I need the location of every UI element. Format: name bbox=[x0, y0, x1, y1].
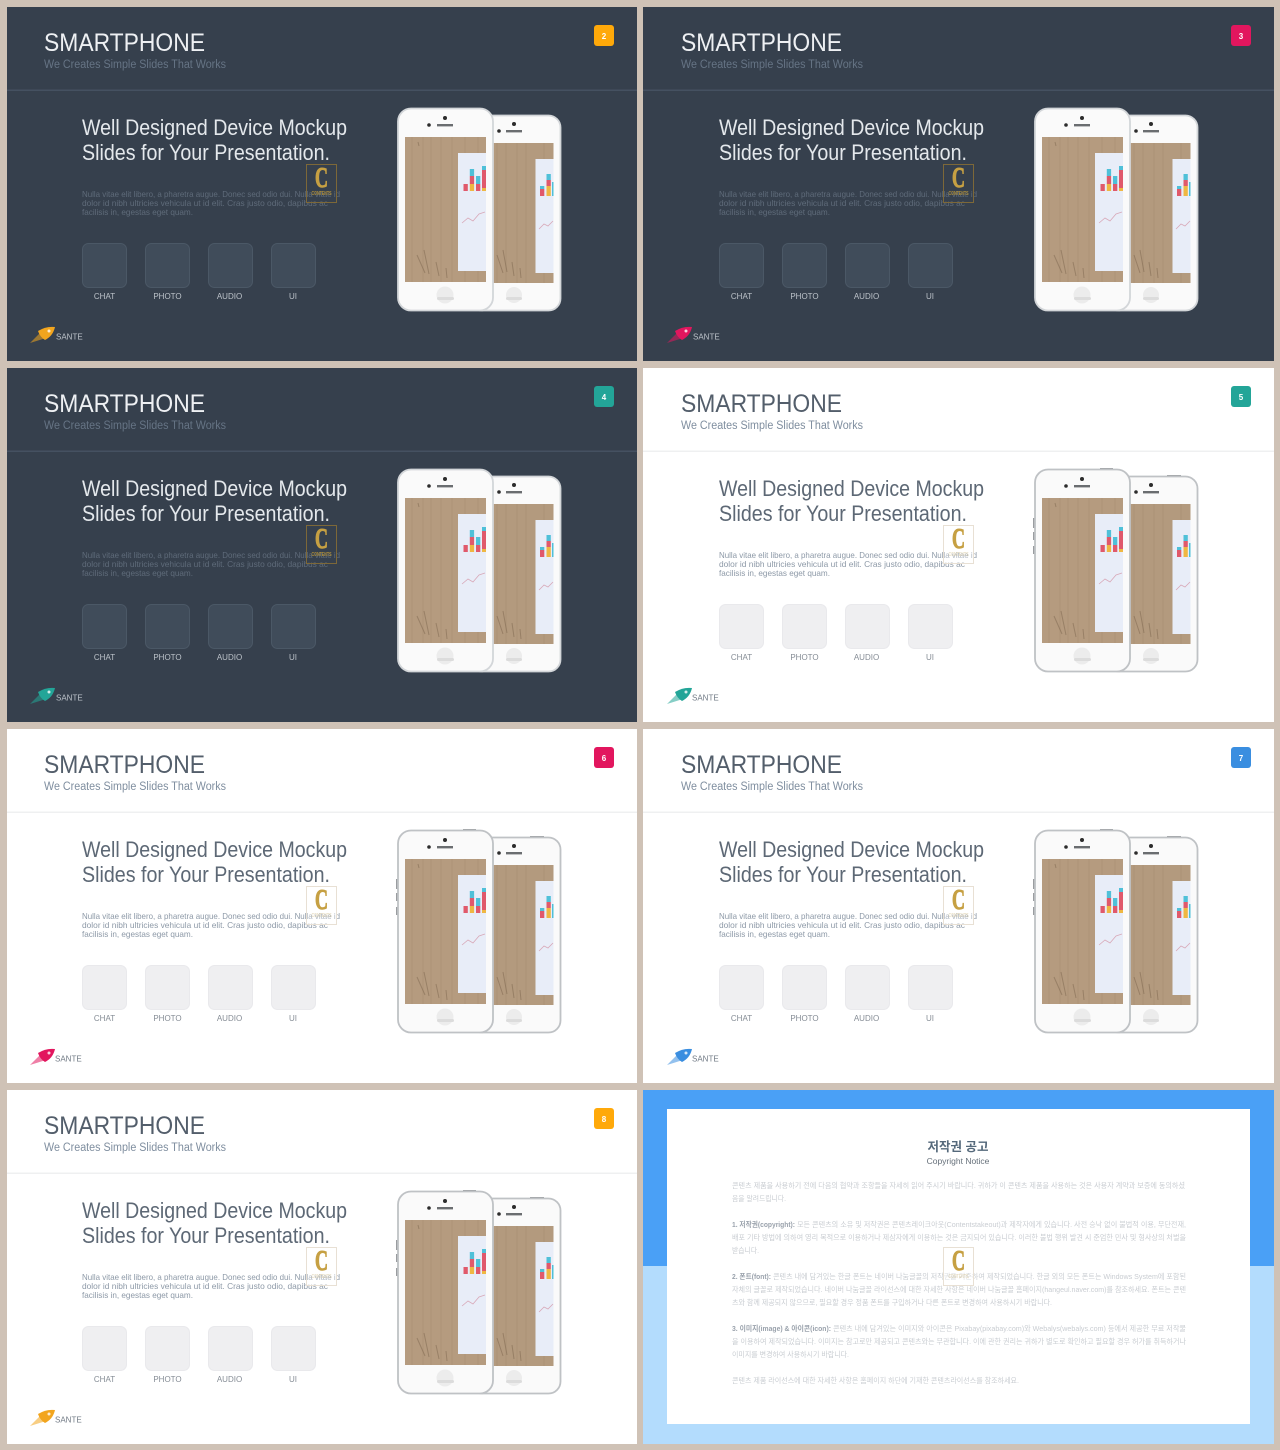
phone mockups bbox=[1033, 107, 1198, 310]
body text bbox=[82, 550, 340, 578]
icon labels bbox=[731, 653, 934, 662]
notice section 2: 콘텐츠 내에 담겨있는 한글 폰트는 네이버 나눔글꼴의 저작권을 기준하여 제작되었습니다. 한글 외의 모든 폰트는 Windows System에 포함된 bbox=[773, 1271, 1186, 1281]
title: SMARTPHONE bbox=[681, 29, 842, 57]
icon tiles bbox=[720, 244, 952, 288]
icon labels: AUDIO bbox=[217, 653, 242, 662]
notice section 2 bbox=[732, 1271, 1186, 1307]
phone mockups bbox=[396, 829, 560, 1032]
heading bbox=[82, 1198, 347, 1248]
slide 6: light, pink badge bbox=[7, 729, 637, 1083]
heading: Well Designed Device Mockup bbox=[82, 1198, 347, 1223]
page number badge bbox=[1231, 25, 1251, 46]
phone mockups bbox=[396, 468, 560, 672]
slide 8: light, orange badge bbox=[7, 1090, 637, 1444]
watermark: CONTENTS bbox=[312, 552, 332, 558]
notice subtitle: Copyright Notice bbox=[927, 1156, 990, 1166]
body text: dolor id nibh ultricies vehicula ut id elit. Cras justo odio, dapibus ac bbox=[719, 920, 966, 930]
icon labels: UI bbox=[926, 1014, 934, 1023]
body text: facilisis in, egestas eget quam. bbox=[82, 568, 193, 578]
title: SMARTPHONE bbox=[44, 1112, 205, 1140]
icon labels: AUDIO bbox=[854, 1014, 879, 1023]
icon labels bbox=[94, 292, 297, 301]
light blue background band bbox=[643, 1266, 1274, 1444]
body text: facilisis in, egestas eget quam. bbox=[82, 1290, 193, 1300]
icon tiles bbox=[82, 244, 316, 288]
icon labels: PHOTO bbox=[153, 653, 182, 662]
page number badge: 5 bbox=[1239, 393, 1244, 402]
body text bbox=[719, 550, 977, 578]
heading bbox=[719, 115, 984, 165]
notice intro bbox=[732, 1180, 1185, 1203]
logo: SANTE bbox=[55, 1054, 82, 1064]
page number badge bbox=[594, 25, 614, 46]
watermark: CONTENTS bbox=[948, 1274, 969, 1280]
body text bbox=[82, 1272, 340, 1300]
page number badge bbox=[1231, 747, 1251, 768]
notice section 3 bbox=[732, 1323, 1186, 1359]
body text: dolor id nibh ultricies vehicula ut id elit. Cras justo odio, dapibus ac bbox=[82, 198, 329, 208]
phone mockups bbox=[1033, 829, 1198, 1032]
page number badge bbox=[594, 386, 614, 407]
logo: SANTE bbox=[693, 332, 720, 342]
watermark: CONTENTS bbox=[312, 1274, 332, 1280]
icon labels: AUDIO bbox=[217, 1014, 242, 1023]
icon labels: AUDIO bbox=[217, 292, 242, 301]
watermark bbox=[944, 884, 974, 924]
watermark: C bbox=[952, 1245, 965, 1277]
icon labels: CHAT bbox=[94, 1014, 115, 1023]
heading: Slides for Your Presentation. bbox=[82, 862, 330, 887]
slide 7: light, blue badge bbox=[643, 729, 1274, 1083]
body text: dolor id nibh ultricies vehicula ut id elit. Cras justo odio, dapibus ac bbox=[719, 198, 966, 208]
heading: Slides for Your Presentation. bbox=[719, 862, 967, 887]
notice closing line: 콘텐츠 제품 라이선스에 대한 자세한 사항은 홈페이지 하단에 기재한 콘텐츠라이선스를 참조하세요. bbox=[732, 1375, 1019, 1385]
notice section 3: 을 이용하여 제작되었습니다. 이미지는 참고로만 제공되고 콘텐츠와는 무관합니다. 이에 관한 권리는 귀하가 별도로 확인하고 필요할 경우 허가를 취득하거나 bbox=[732, 1336, 1186, 1346]
notice section 1: 1. 저작권(copyright): bbox=[732, 1219, 795, 1229]
body text: dolor id nibh ultricies vehicula ut id elit. Cras justo odio, dapibus ac bbox=[82, 920, 329, 930]
heading: Well Designed Device Mockup bbox=[82, 115, 347, 140]
notice section 3: 콘텐츠 내에 담겨있는 이미지와 아이콘은 Pixabay(pixabay.com)와 Webalys(webalys.com) 등에서 제공한 무료 저작물 bbox=[833, 1323, 1186, 1333]
icon labels: AUDIO bbox=[854, 653, 879, 662]
body text: Nulla vitae elit libero, a pharetra augue. Donec sed odio dui. Nulla vitae id bbox=[82, 1272, 340, 1282]
body text: facilisis in, egestas eget quam. bbox=[719, 568, 830, 578]
icon labels: PHOTO bbox=[790, 653, 819, 662]
icon labels: PHOTO bbox=[153, 292, 182, 301]
page number badge: 6 bbox=[602, 754, 607, 763]
phone mockups bbox=[396, 107, 560, 310]
body text: dolor id nibh ultricies vehicula ut id elit. Cras justo odio, dapibus ac bbox=[719, 559, 966, 569]
subtitle: We Creates Simple Slides That Works bbox=[44, 781, 226, 793]
heading bbox=[82, 115, 347, 165]
icon labels: UI bbox=[926, 292, 934, 301]
notice section 1 bbox=[732, 1219, 1186, 1255]
watermark: CONTENTS bbox=[948, 552, 969, 558]
page number badge bbox=[594, 1108, 614, 1129]
heading bbox=[82, 837, 347, 887]
heading bbox=[82, 476, 347, 526]
page number badge: 4 bbox=[602, 393, 607, 402]
logo: SANTE bbox=[55, 1416, 82, 1424]
icon tiles bbox=[720, 604, 952, 648]
icon labels bbox=[731, 292, 934, 301]
body text: dolor id nibh ultricies vehicula ut id elit. Cras justo odio, dapibus ac bbox=[82, 1281, 329, 1291]
icon labels: CHAT bbox=[731, 292, 752, 301]
body text: Nulla vitae elit libero, a pharetra augue. Donec sed odio dui. Nulla vitae id bbox=[719, 189, 977, 199]
icon tiles bbox=[82, 1326, 316, 1370]
heading: Slides for Your Presentation. bbox=[719, 501, 967, 526]
watermark bbox=[306, 884, 336, 924]
icon labels: UI bbox=[289, 1014, 297, 1023]
watermark: CONTENTS bbox=[312, 913, 332, 919]
logo: SANTE bbox=[56, 332, 83, 342]
heading: Slides for Your Presentation. bbox=[82, 1223, 330, 1248]
heading bbox=[719, 837, 984, 887]
slide 9: copyright notice bbox=[643, 1090, 1274, 1444]
page number badge bbox=[1231, 386, 1251, 407]
icon labels bbox=[731, 1014, 934, 1023]
watermark: CONTENTS bbox=[948, 191, 969, 197]
slide 5: light, teal badge bbox=[643, 368, 1274, 722]
icon tiles bbox=[82, 604, 316, 648]
icon labels: CHAT bbox=[94, 653, 115, 662]
icon labels: PHOTO bbox=[153, 1014, 182, 1023]
notice intro: 콘텐츠 제품을 사용하기 전에 다음의 협약과 조항들을 자세히 읽어 주시기 바랍니다. 귀하가 이 콘텐츠 제품을 사용하는 것은 사용자 계약과 보증에 동의하셨 bbox=[732, 1180, 1185, 1190]
body text: Nulla vitae elit libero, a pharetra augue. Donec sed odio dui. Nulla vitae id bbox=[719, 550, 977, 560]
watermark: C bbox=[952, 523, 965, 555]
icon labels: CHAT bbox=[731, 1014, 752, 1023]
white notice card bbox=[667, 1109, 1250, 1424]
page number badge: 3 bbox=[1239, 32, 1244, 41]
notice section 3: 3. 이미지(image) & 아이콘(icon): bbox=[732, 1323, 831, 1333]
icon labels: UI bbox=[289, 1375, 297, 1384]
body text bbox=[82, 911, 340, 939]
slide 3: dark, pink badge bbox=[643, 7, 1274, 361]
icon tiles bbox=[82, 966, 316, 1010]
phone mockups bbox=[396, 1190, 560, 1394]
icon labels: CHAT bbox=[731, 653, 752, 662]
heading: Well Designed Device Mockup bbox=[719, 476, 984, 501]
heading: Well Designed Device Mockup bbox=[82, 476, 347, 501]
watermark bbox=[306, 162, 336, 202]
logo: SANTE bbox=[56, 694, 83, 702]
body text: facilisis in, egestas eget quam. bbox=[82, 929, 193, 939]
icon labels: UI bbox=[926, 653, 934, 662]
heading: Well Designed Device Mockup bbox=[719, 837, 984, 862]
notice section 2: 2. 폰트(font): bbox=[732, 1272, 771, 1281]
logo bbox=[30, 1049, 82, 1065]
slide 4: dark, teal badge bbox=[7, 368, 637, 722]
notice section 3: 이미지를 변경하여 사용하시기 바랍니다. bbox=[732, 1349, 849, 1359]
logo bbox=[667, 688, 719, 704]
subtitle: We Creates Simple Slides That Works bbox=[44, 1142, 226, 1154]
body text bbox=[82, 189, 340, 217]
subtitle: We Creates Simple Slides That Works bbox=[44, 420, 226, 432]
watermark bbox=[944, 1245, 974, 1286]
logo: SANTE bbox=[692, 1054, 719, 1064]
icon labels bbox=[94, 653, 297, 662]
logo bbox=[667, 327, 720, 343]
notice section 1: 배포 기타 방법에 의하여 영리 목적으로 이용하거나 제삼자에게 이용하는 것은 금지되어 있습니다. 이러한 불법 행위 발견 시 준엄한 민사 및 형사상의 처벌을 bbox=[732, 1232, 1186, 1242]
logo bbox=[30, 327, 83, 343]
heading: Well Designed Device Mockup bbox=[719, 115, 984, 140]
blue background band bbox=[643, 1090, 1274, 1266]
notice section 2: 자체의 글꼴로 제작되었습니다. 네이버 나눔글꼴 라이선스에 대한 자세한 사항은 네이버 나눔글꼴 홈페이지(hangeul.naver.com)를 참조하세요. 폰트는 콘텐 bbox=[732, 1284, 1186, 1294]
subtitle: We Creates Simple Slides That Works bbox=[681, 59, 863, 71]
body text bbox=[719, 911, 977, 939]
notice intro: 음을 알려드립니다. bbox=[732, 1193, 786, 1203]
page number badge bbox=[594, 747, 614, 768]
page number badge: 8 bbox=[602, 1115, 607, 1124]
body text: facilisis in, egestas eget quam. bbox=[82, 207, 193, 217]
watermark: C bbox=[315, 884, 328, 916]
subtitle: We Creates Simple Slides That Works bbox=[681, 420, 863, 432]
heading bbox=[719, 476, 984, 526]
heading: Well Designed Device Mockup bbox=[82, 837, 347, 862]
icon labels: PHOTO bbox=[790, 1014, 819, 1023]
watermark: C bbox=[315, 523, 328, 555]
title: SMARTPHONE bbox=[44, 29, 205, 57]
icon labels: UI bbox=[289, 653, 297, 662]
icon labels: AUDIO bbox=[854, 292, 879, 301]
icon tiles bbox=[720, 966, 952, 1010]
title: SMARTPHONE bbox=[44, 390, 205, 418]
icon labels: UI bbox=[289, 292, 297, 301]
watermark bbox=[306, 523, 336, 564]
watermark: CONTENTS bbox=[948, 913, 969, 919]
body text: Nulla vitae elit libero, a pharetra augue. Donec sed odio dui. Nulla vitae id bbox=[82, 911, 340, 921]
slide 2: dark, orange badge bbox=[7, 7, 637, 361]
subtitle: We Creates Simple Slides That Works bbox=[681, 781, 863, 793]
notice section 1: 받습니다. bbox=[732, 1245, 759, 1255]
icon labels: AUDIO bbox=[217, 1375, 242, 1384]
watermark bbox=[944, 523, 974, 564]
watermark: C bbox=[952, 162, 965, 194]
title: SMARTPHONE bbox=[681, 390, 842, 418]
watermark: C bbox=[952, 884, 965, 916]
watermark bbox=[306, 1245, 336, 1286]
page number badge: 2 bbox=[602, 32, 607, 41]
logo bbox=[667, 1049, 719, 1065]
icon labels: CHAT bbox=[94, 1375, 115, 1384]
icon labels: CHAT bbox=[94, 292, 115, 301]
heading: Slides for Your Presentation. bbox=[719, 140, 967, 165]
body text: dolor id nibh ultricies vehicula ut id elit. Cras justo odio, dapibus ac bbox=[82, 559, 329, 569]
notice title: 저작권 공고 bbox=[928, 1139, 988, 1154]
logo bbox=[30, 1410, 82, 1426]
notice section 2: 츠와 함께 제공되지 않으므로, 필요할 경우 정품 폰트를 구입하거나 다른 폰트로 변경하여 사용하시기 바랍니다. bbox=[732, 1297, 1052, 1307]
logo: SANTE bbox=[692, 694, 719, 702]
title: SMARTPHONE bbox=[44, 751, 205, 779]
heading: Slides for Your Presentation. bbox=[82, 140, 330, 165]
page number badge: 7 bbox=[1239, 754, 1244, 763]
icon labels: PHOTO bbox=[153, 1375, 182, 1384]
body text: facilisis in, egestas eget quam. bbox=[719, 929, 830, 939]
subtitle: We Creates Simple Slides That Works bbox=[44, 59, 226, 71]
heading: Slides for Your Presentation. bbox=[82, 501, 330, 526]
body text: Nulla vitae elit libero, a pharetra augue. Donec sed odio dui. Nulla vitae id bbox=[719, 911, 977, 921]
icon labels: PHOTO bbox=[790, 292, 819, 301]
body text: facilisis in, egestas eget quam. bbox=[719, 207, 830, 217]
notice section 1: 모든 콘텐츠의 소유 및 저작권은 콘텐츠레이크아웃(Contentstakeout)과 제작자에게 있습니다. 사전 승낙 없이 불법적 이용, 무단전재, bbox=[797, 1219, 1186, 1229]
logo bbox=[30, 688, 83, 704]
body text: Nulla vitae elit libero, a pharetra augue. Donec sed odio dui. Nulla vitae id bbox=[82, 189, 340, 199]
phone mockups bbox=[1033, 468, 1198, 672]
watermark bbox=[944, 162, 974, 202]
icon labels bbox=[94, 1014, 297, 1023]
watermark: C bbox=[315, 162, 328, 194]
body text: Nulla vitae elit libero, a pharetra augue. Donec sed odio dui. Nulla vitae id bbox=[82, 550, 340, 560]
title: SMARTPHONE bbox=[681, 751, 842, 779]
watermark: C bbox=[315, 1245, 328, 1277]
body text bbox=[719, 189, 977, 217]
watermark: CONTENTS bbox=[312, 191, 332, 197]
icon labels bbox=[94, 1375, 297, 1384]
